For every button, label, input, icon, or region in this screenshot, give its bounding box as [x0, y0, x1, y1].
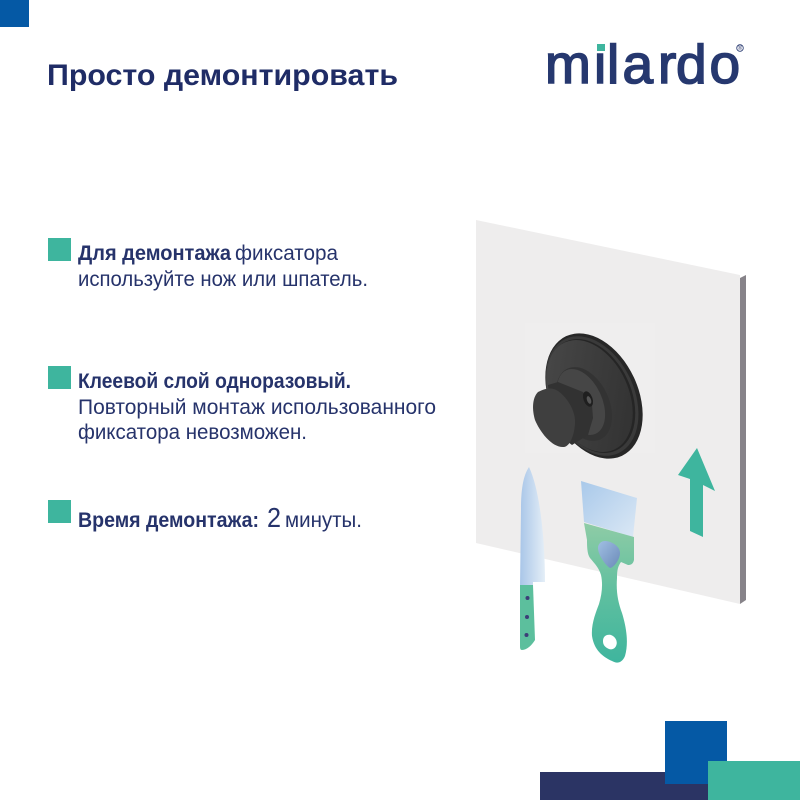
- bullet marker 3: [48, 500, 71, 523]
- bullet block 3: [48, 500, 362, 533]
- text: dismantling tools: фиксатора: [235, 242, 338, 265]
- bullet marker 2: [48, 366, 71, 389]
- text: single-use adhesive: Повторный монтаж использованного: [78, 396, 436, 419]
- title: Просто демонтировать: [47, 59, 398, 92]
- logo: milardo: milardo: [545, 33, 740, 95]
- text: dismantling tools: используйте нож или шпатель.: [78, 268, 368, 291]
- text: single-use adhesive: фиксатора невозможен.: [78, 421, 307, 444]
- text: dismantling tools: Для демонтажа: [78, 242, 231, 265]
- text: dismantling time: [78, 502, 362, 533]
- icon: up arrow: [678, 448, 715, 537]
- wall panel: [476, 220, 746, 604]
- logo: milardo: ®: [738, 45, 743, 52]
- bullet block 1: [48, 238, 368, 291]
- text: dismantling time: минуты.: [285, 509, 362, 532]
- illustration: wall panel with fixture and tools: [476, 220, 746, 663]
- corner square top-left: [0, 0, 29, 27]
- bullet marker 1: [48, 238, 71, 261]
- text: dismantling time: Время демонтажа:: [78, 509, 259, 532]
- icon: knife: [520, 467, 545, 650]
- text: single-use adhesive: [78, 370, 436, 444]
- icon: scraper: [581, 481, 637, 663]
- text: dismantling time: 2: [267, 502, 281, 533]
- text: dismantling tools: [78, 242, 368, 291]
- fixture knob: [526, 318, 662, 474]
- text: single-use adhesive: Клеевой слой одноразовый.: [78, 370, 351, 393]
- decorative blocks bottom-right: [540, 721, 800, 800]
- bullet block 2: [48, 366, 436, 444]
